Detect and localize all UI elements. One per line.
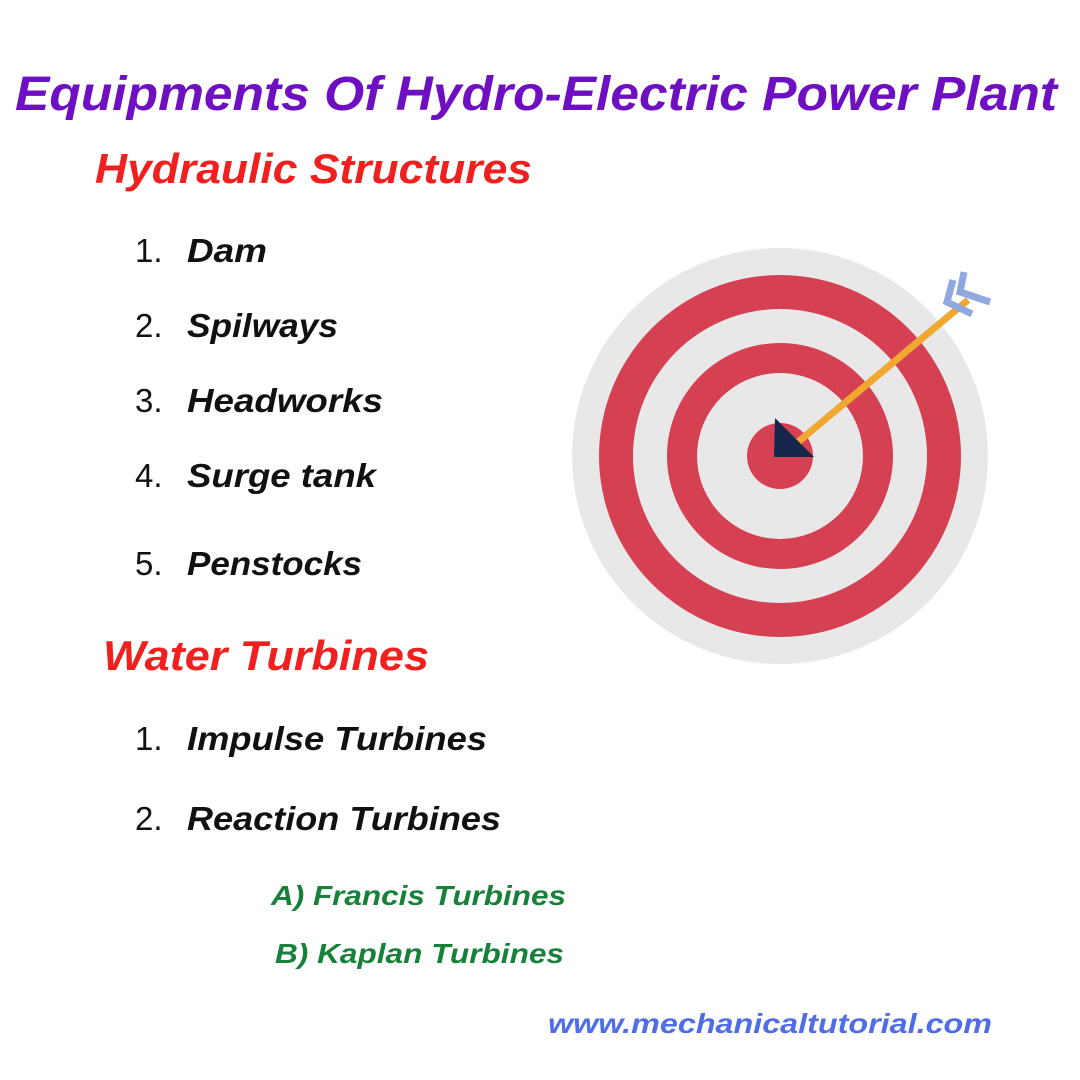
item reaction: Reaction Turbines [187, 800, 501, 837]
item 2 [135, 307, 338, 344]
list: hydraulic structures [135, 232, 383, 582]
item impulse: 1. [135, 720, 163, 757]
item 3: Headworks [187, 382, 383, 419]
item 2: 2. [135, 307, 163, 344]
item 5: Penstocks [187, 545, 362, 582]
item 1: Dam [187, 232, 267, 269]
heading: hydraulic structures: Hydraulic Structures [95, 145, 532, 192]
item 1: 1. [135, 232, 163, 269]
website url: www.mechanicaltutorial.com [548, 1008, 992, 1039]
item impulse: Impulse Turbines [187, 720, 487, 757]
title: Equipments Of Hydro-Electric Power Plant [15, 68, 1059, 121]
icon: target with arrow [572, 248, 990, 664]
kaplan: B) Kaplan Turbines [275, 938, 564, 969]
item 2: Spilways [187, 307, 338, 344]
item 5: 5. [135, 545, 163, 582]
item reaction: 2. [135, 800, 163, 837]
heading: water turbines: Water Turbines [103, 632, 429, 679]
francis: A) Francis Turbines [270, 880, 566, 911]
list: water turbines [135, 720, 501, 837]
item 1 [135, 232, 267, 269]
item 4: 4. [135, 457, 163, 494]
item 3: 3. [135, 382, 163, 419]
sublist: reaction turbine types [270, 880, 566, 969]
item 4: Surge tank [187, 457, 378, 494]
